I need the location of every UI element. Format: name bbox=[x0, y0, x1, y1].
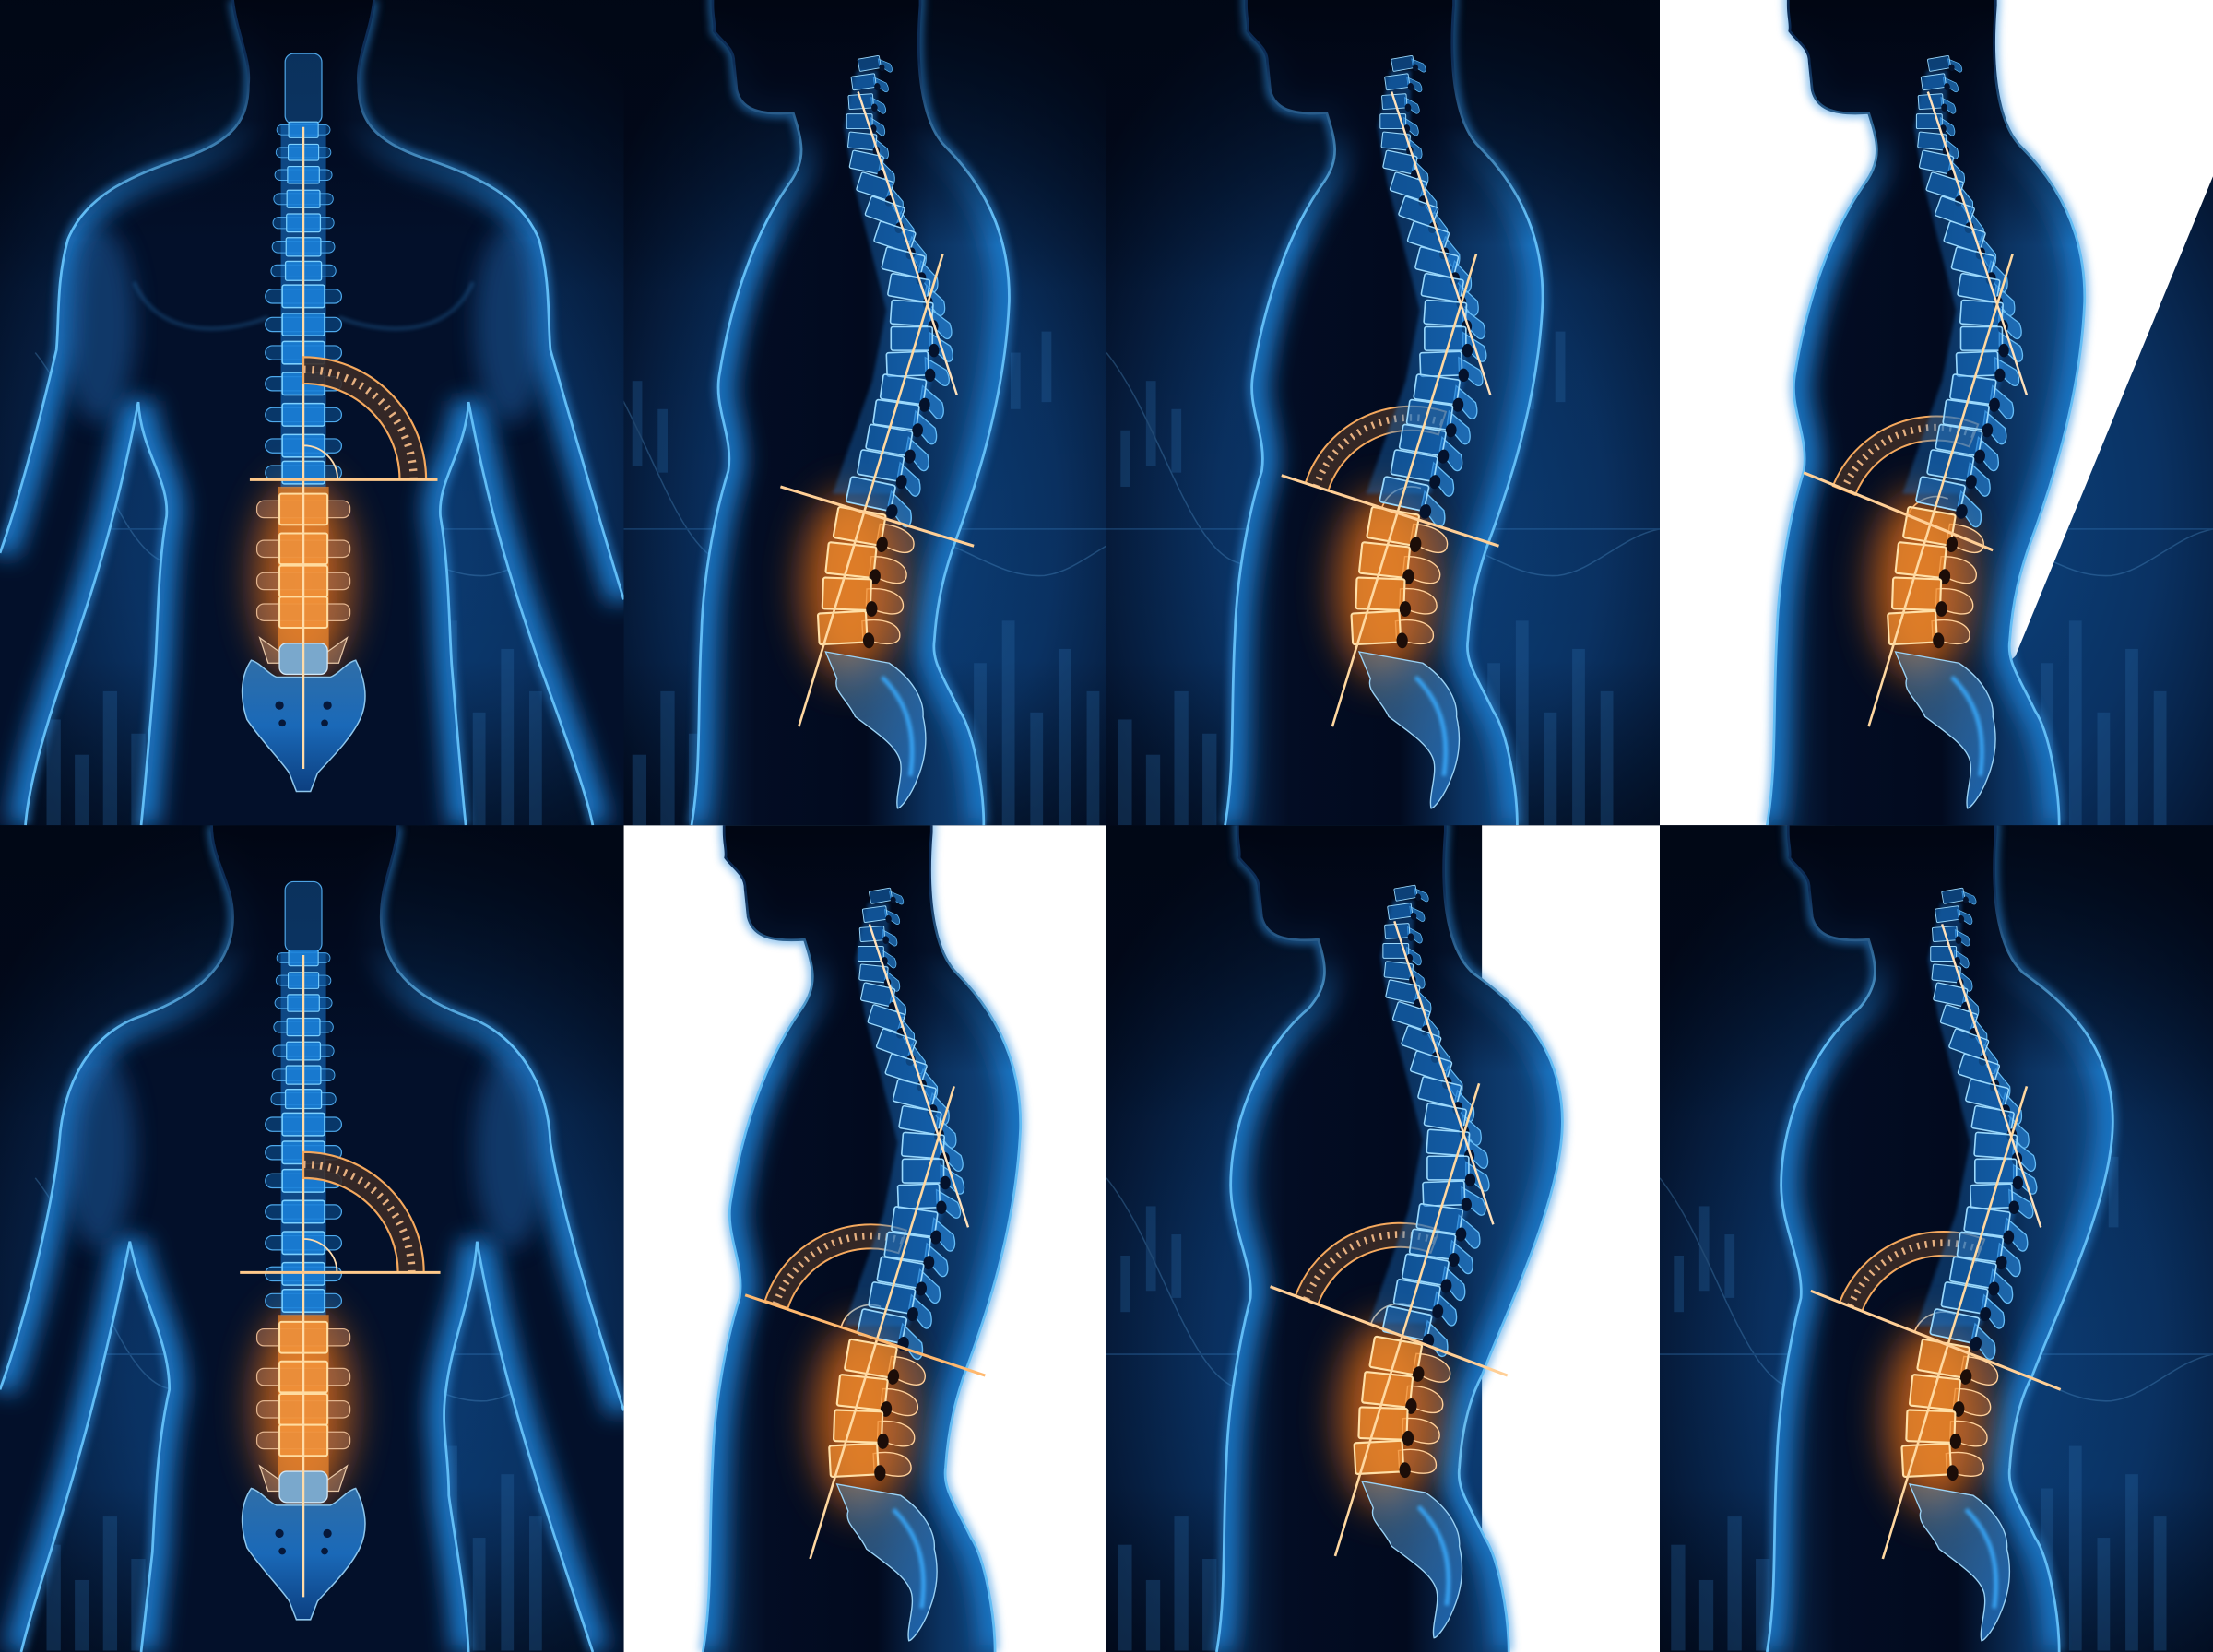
panel: side view, top third bbox=[1106, 0, 1660, 825]
protractor bbox=[303, 357, 426, 479]
spine, back view bbox=[243, 881, 365, 1620]
spine, side view bbox=[1869, 53, 2027, 808]
background bbox=[0, 0, 624, 825]
angled measuring line bbox=[745, 1295, 985, 1375]
background chart bbox=[1106, 311, 1660, 825]
angled measuring line bbox=[1271, 1287, 1508, 1375]
background chart bbox=[1660, 311, 2213, 825]
spine, side view bbox=[811, 886, 968, 1641]
side body bbox=[703, 812, 1021, 1652]
angled measuring line bbox=[1804, 473, 1993, 550]
front body bbox=[0, 0, 624, 825]
side body bbox=[1767, 0, 2085, 825]
spine, side view bbox=[799, 53, 957, 808]
protractor bbox=[303, 1152, 424, 1272]
horizontal measuring line bbox=[250, 478, 437, 480]
white backdrop bbox=[624, 825, 1106, 1652]
back body bbox=[0, 825, 624, 1652]
protractor bbox=[1840, 1198, 1984, 1343]
background bbox=[1660, 0, 2213, 825]
spine, side view bbox=[1335, 883, 1493, 1638]
spine, side view bbox=[1883, 886, 2041, 1641]
panel: side view, bottom second with white backdrop bbox=[624, 812, 1106, 1652]
background bbox=[0, 825, 624, 1652]
background chart bbox=[35, 352, 542, 825]
panel: back view, bottom left bbox=[0, 825, 624, 1652]
spine, side view bbox=[1332, 53, 1490, 808]
panel: side view, bottom third with partial white backdrop bbox=[1106, 812, 1660, 1652]
background vignette bbox=[0, 825, 624, 1652]
side body bbox=[1767, 812, 2112, 1652]
horizontal measuring line bbox=[240, 1271, 441, 1273]
protractor bbox=[1306, 377, 1446, 518]
background bbox=[1660, 825, 2213, 1652]
protractor bbox=[1833, 383, 1978, 527]
white backdrop bbox=[1482, 825, 1660, 1652]
protractor bbox=[1296, 1191, 1439, 1335]
background bbox=[1106, 0, 1660, 825]
side body bbox=[692, 0, 1009, 825]
spine, front view bbox=[243, 53, 365, 792]
background chart bbox=[1660, 1136, 2213, 1650]
angled measuring line bbox=[780, 487, 974, 546]
background chart bbox=[623, 332, 1106, 825]
panel: side view, top right with white backdrop bbox=[1660, 0, 2213, 825]
angled measuring line bbox=[1282, 476, 1499, 546]
side body bbox=[1216, 812, 1562, 1652]
angled measuring line bbox=[1811, 1291, 2061, 1389]
protractor bbox=[765, 1195, 906, 1336]
background bbox=[624, 0, 1106, 825]
white backdrop bbox=[1660, 0, 2213, 825]
side body bbox=[1225, 0, 1543, 825]
background vignette bbox=[624, 0, 1106, 825]
background vignette bbox=[1106, 0, 1660, 825]
panel: side view, bottom right bbox=[1660, 812, 2213, 1652]
panel: front view, top left bbox=[0, 0, 624, 825]
background vignette bbox=[1660, 825, 2213, 1652]
background chart bbox=[35, 1136, 588, 1650]
background bbox=[1106, 825, 1660, 1652]
background chart bbox=[1106, 1136, 1660, 1650]
background vignette bbox=[1106, 825, 1660, 1652]
panel: side view, top second bbox=[623, 0, 1106, 826]
background vignette bbox=[0, 0, 624, 825]
